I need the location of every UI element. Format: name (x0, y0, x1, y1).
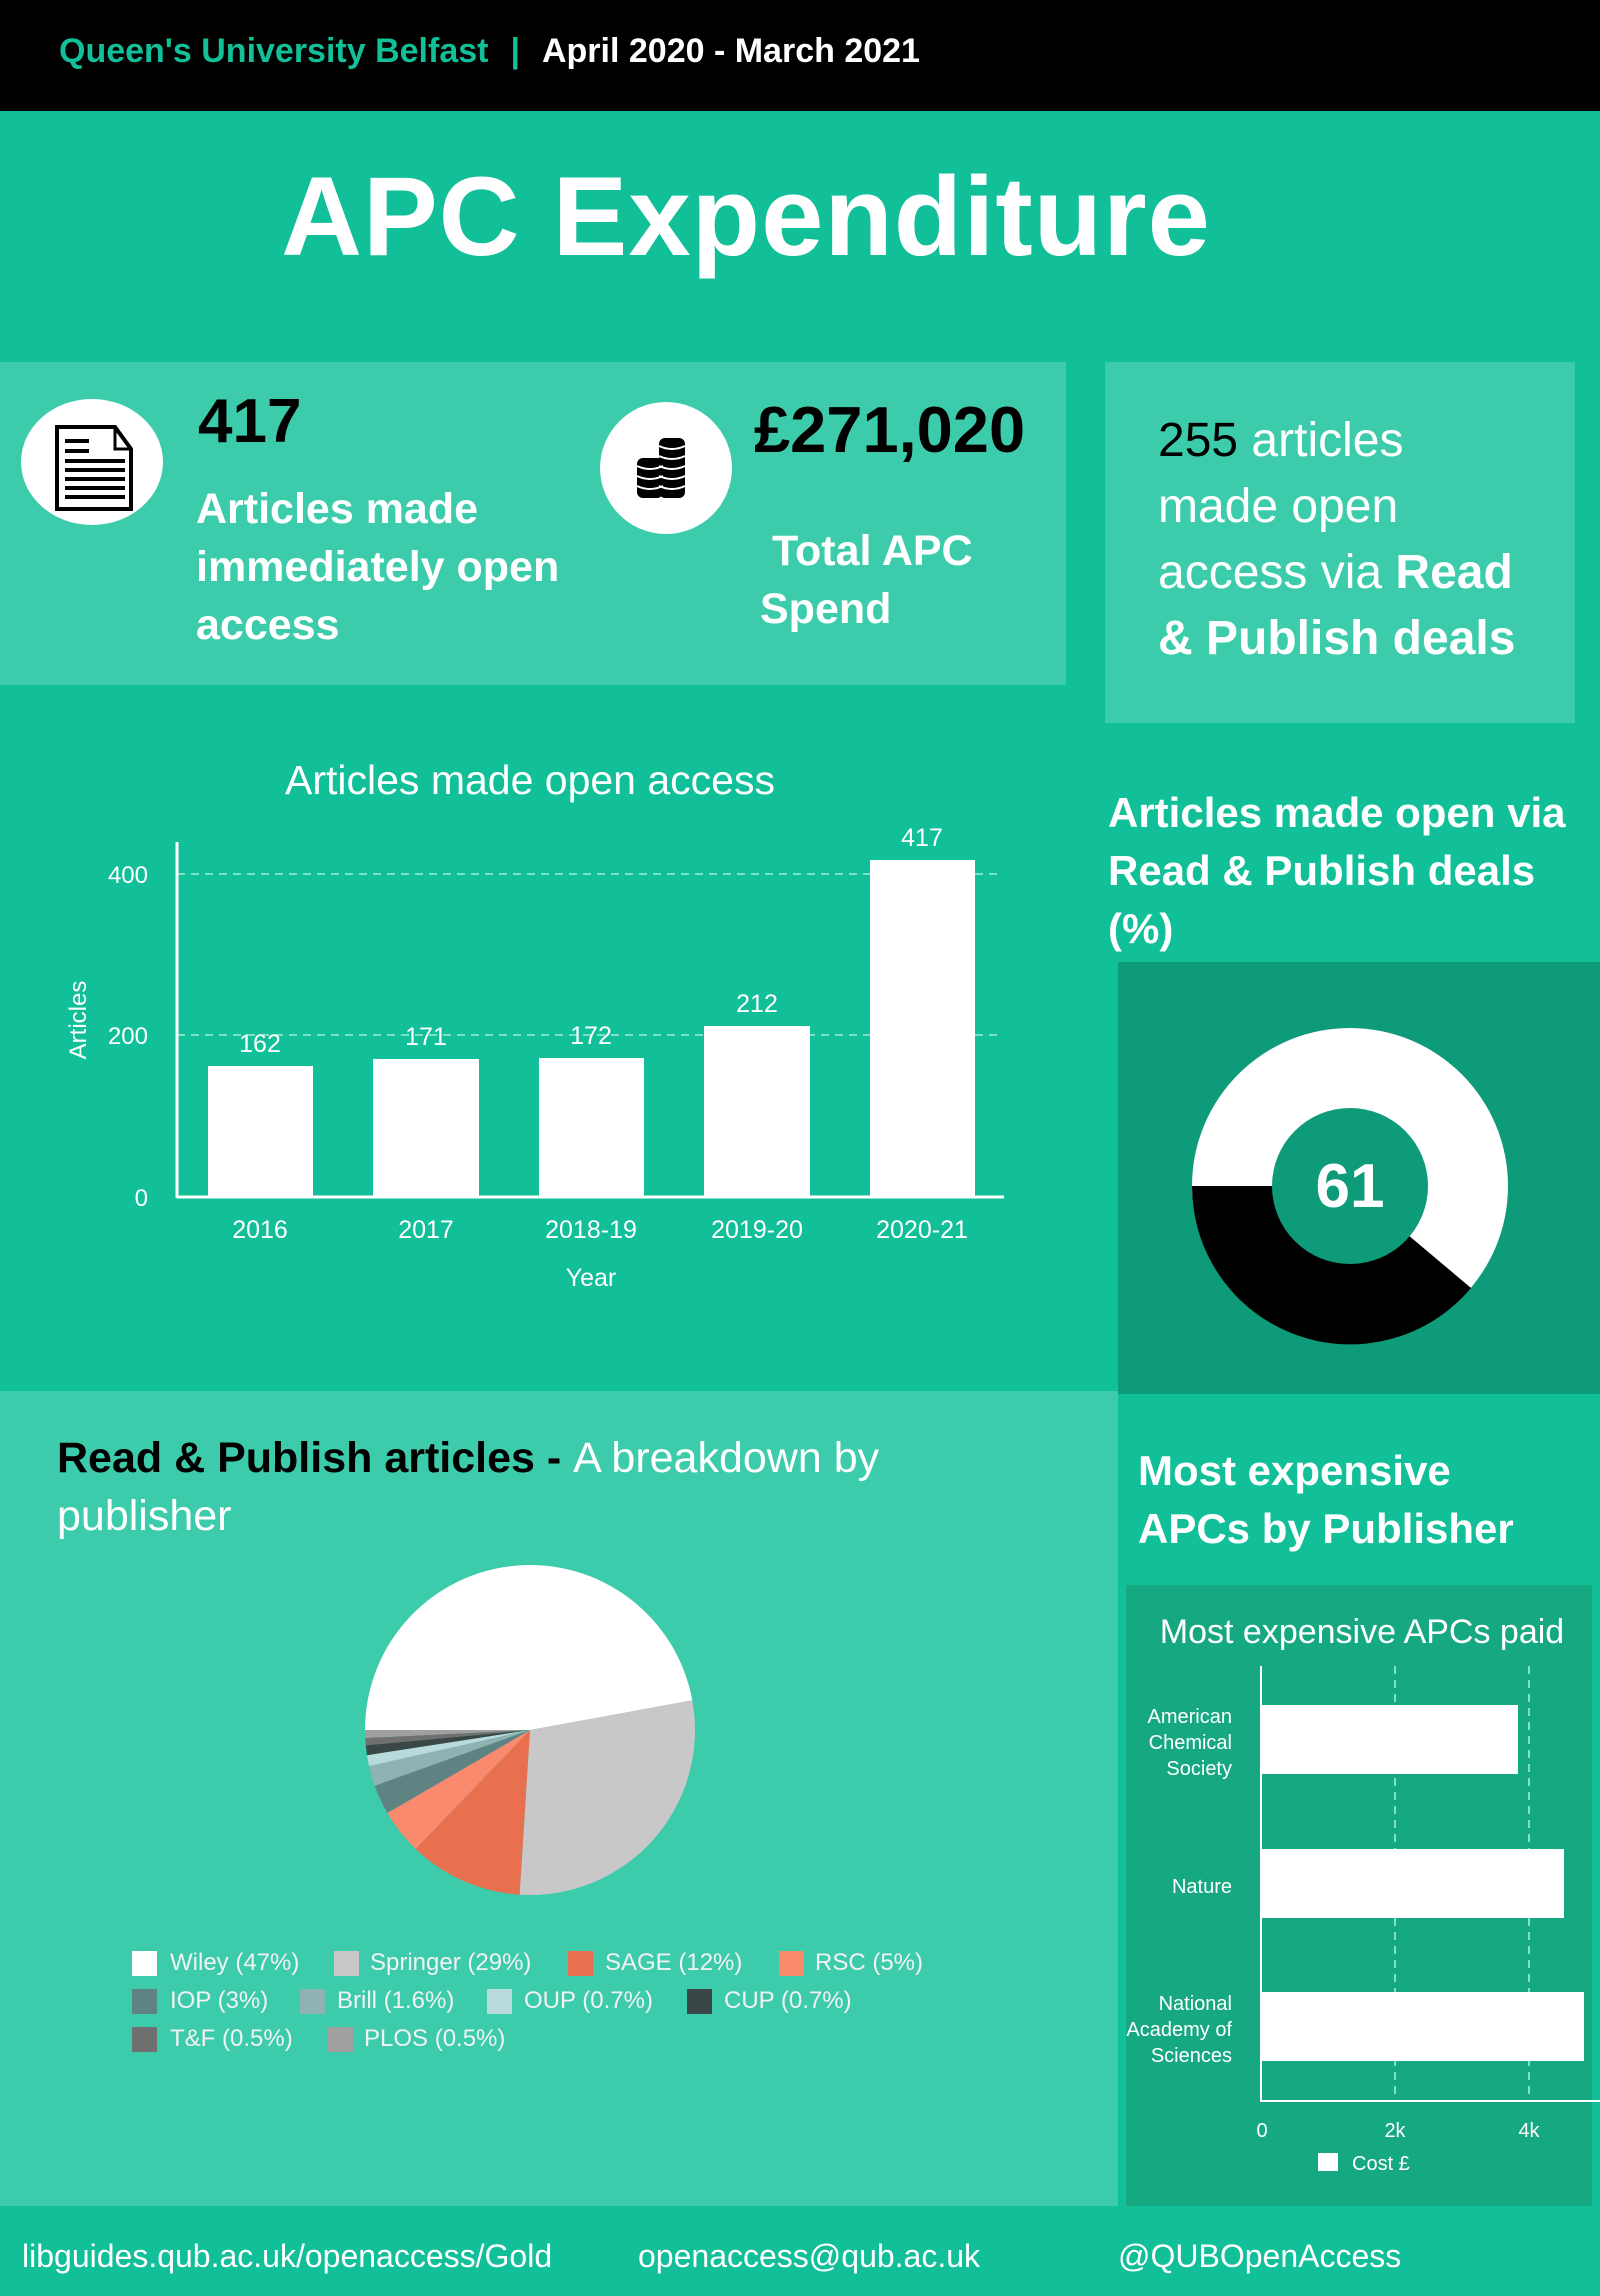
title: APC Expenditure (281, 154, 1211, 279)
panel: most expensive APCs chart: Chemical (1149, 1732, 1232, 1754)
chart: articles made open access: 171 (405, 1023, 447, 1051)
heading: most expensive APCs: APCs by Publisher (1138, 1505, 1514, 1552)
heading: read & publish % (1108, 789, 1566, 952)
bars (208, 860, 975, 1197)
chart: articles made open access: 2020-21 (876, 1216, 968, 1244)
footer links: @QUBOpenAccess (1118, 2238, 1401, 2274)
panel: most expensive APCs chart: American (1148, 1706, 1232, 1728)
chart title: Articles made open access (285, 757, 775, 803)
panel: key stats (0, 362, 1066, 685)
header bar (0, 0, 1600, 111)
legend: PLOS (0.5%) (364, 2025, 505, 2052)
legend (132, 1949, 923, 2052)
legend: T&F (0.5%) (170, 2025, 293, 2052)
icon: document (21, 399, 163, 525)
chart: articles made open access: 2019-20 (711, 1216, 803, 1244)
panel: most expensive APCs chart: Cost £ (1352, 2153, 1410, 2175)
label: total APC spend: Total APC (772, 527, 973, 575)
chart: articles made open access: 172 (570, 1022, 612, 1050)
heading: publisher (57, 1492, 232, 1540)
text: 255 articles: access via Read (1158, 546, 1513, 599)
label: articles made immediately open access: access (196, 601, 340, 649)
heading: most expensive APCs (1138, 1447, 1514, 1552)
panel: most expensive APCs chart: Society (1166, 1758, 1232, 1780)
label: total APC spend: Spend (760, 585, 891, 633)
chart: articles made open access: 200 (108, 1023, 148, 1050)
heading: read & publish %: Articles made open via (1108, 789, 1566, 836)
pie chart (365, 1565, 695, 1895)
label: articles made immediately open access (196, 485, 559, 649)
legend: Springer (29%) (370, 1949, 531, 1976)
text: 255 articles: 255 articles (1158, 414, 1403, 467)
heading: read & publish %: Read & Publish deals (1108, 847, 1535, 894)
heading: most expensive APCs: Most expensive (1138, 1447, 1451, 1494)
label: articles made immediately open access: immediately open (196, 543, 559, 591)
legend: CUP (0.7%) (724, 1987, 852, 2014)
legend: OUP (0.7%) (524, 1987, 653, 2014)
legend: SAGE (12%) (605, 1949, 742, 1976)
chart: articles made open access (65, 757, 1004, 1292)
chart: articles made open access: 0 (135, 1185, 148, 1212)
stat: 417: 417 (198, 387, 301, 456)
panel: most expensive APCs chart (1126, 1585, 1592, 2206)
label: articles made immediately open access: Articles made (196, 485, 478, 533)
chart: articles made open access: Articles (65, 981, 92, 1059)
heading: read & publish %: (%) (1108, 905, 1173, 952)
chart: articles made open access: 2018-19 (545, 1216, 637, 1244)
panel: publisher breakdown (0, 1391, 1118, 2206)
text: 255 articles: made open (1158, 480, 1398, 533)
label: total APC spend (760, 527, 973, 633)
footer links (22, 2238, 1401, 2274)
chart: articles made open access: 2017 (398, 1216, 454, 1244)
heading (57, 1434, 879, 1540)
legend: Brill (1.6%) (337, 1987, 454, 2014)
footer links: openaccess@qub.ac.uk (638, 2238, 980, 2274)
stat: total spend: £271,020 (754, 393, 1025, 466)
panel: most expensive APCs chart: 4k (1518, 2120, 1541, 2142)
panel: most expensive APCs chart: 2k (1384, 2120, 1407, 2142)
text: 255 articles: & Publish deals (1158, 612, 1515, 665)
donut chart: 61 (1316, 1152, 1384, 1221)
text: 255 articles (1158, 414, 1515, 665)
donut chart (1192, 1028, 1508, 1344)
legend: IOP (3%) (170, 1987, 268, 2014)
panel: most expensive APCs chart: National (1159, 1993, 1232, 2015)
legend: Wiley (47%) (170, 1949, 299, 1976)
panel: most expensive APCs chart: Sciences (1151, 2045, 1232, 2067)
panel: read & publish count (1105, 362, 1575, 723)
heading: Read & Publish articles - A breakdown by (57, 1434, 879, 1482)
footer links: libguides.qub.ac.uk/openaccess/Gold (22, 2238, 552, 2274)
chart: articles made open access: 400 (108, 862, 148, 889)
panel: donut (1118, 962, 1600, 1394)
panel: most expensive APCs chart: Academy of (1126, 2019, 1232, 2041)
panel: most expensive APCs chart: Most expensive APCs paid (1160, 1613, 1564, 1651)
chart: articles made open access: 162 (239, 1030, 281, 1058)
chart: articles made open access: 2016 (232, 1216, 288, 1244)
chart: articles made open access: 417 (901, 824, 943, 852)
chart: articles made open access: Year (566, 1264, 616, 1292)
panel: most expensive APCs chart: Nature (1172, 1876, 1232, 1898)
icon: coins (600, 402, 732, 534)
header text: Queen's University Belfast | April 2020 - March 2021 (59, 32, 920, 70)
panel: most expensive APCs chart: 0 (1256, 2120, 1268, 2142)
legend: RSC (5%) (815, 1949, 923, 1976)
chart: articles made open access: 212 (736, 990, 778, 1018)
